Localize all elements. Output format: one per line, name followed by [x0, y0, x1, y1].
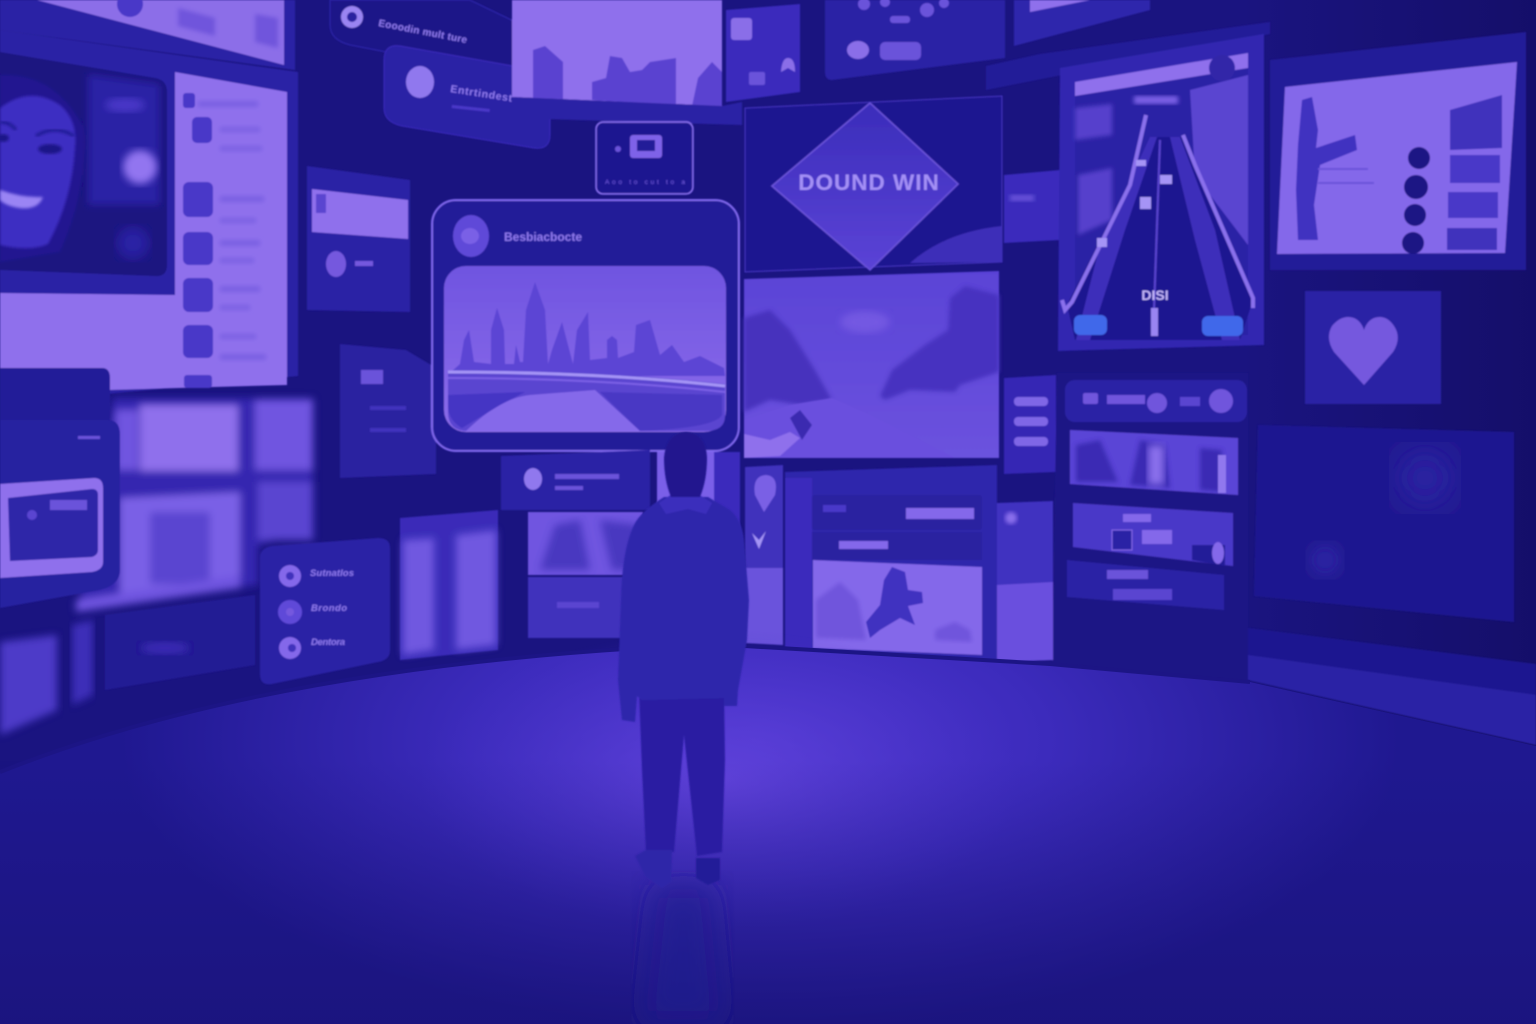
- icon: heart: [1329, 317, 1398, 385]
- panel: bottom left cards: [0, 595, 255, 735]
- legs: [639, 690, 725, 856]
- panel: lower left blurred screens: [76, 398, 498, 660]
- panel: left mid card: [307, 166, 410, 312]
- panel: dark blank screen: [1254, 425, 1514, 622]
- panel: main landscape card: [432, 200, 739, 451]
- panel: top left floating cards: [330, 0, 550, 148]
- head: [664, 432, 707, 497]
- panel: diamond title screen: [745, 96, 1002, 272]
- panel: lower media feed: [785, 465, 1053, 662]
- screen wall: [0, 0, 1536, 745]
- panel: main landscape card: Besbiacbocte: [504, 230, 582, 244]
- panel: lower central cards: [501, 450, 740, 647]
- panel: top left floating cards: Entrtindestuy: [450, 83, 527, 107]
- image: figure in snow: [813, 560, 982, 655]
- list icons: [183, 93, 213, 388]
- panel: top centre city screen: [512, 0, 742, 125]
- panel: heart card: [1305, 291, 1441, 404]
- panel: side small cards: [1004, 170, 1060, 474]
- list lines: [198, 101, 266, 360]
- jacket: [618, 497, 749, 722]
- panel: contact list card: [260, 538, 390, 684]
- panel: figure sketch screen: [1270, 32, 1526, 270]
- race track: [1062, 115, 1253, 340]
- image: futuristic city and road: [444, 266, 726, 432]
- diamond text: DOUND WIN: [798, 170, 940, 195]
- panel: racing game screen: [1058, 34, 1264, 351]
- panel: right lower wall strip: [1248, 628, 1536, 745]
- panel: right column of media cards: [1052, 373, 1248, 682]
- photo: smiling woman: [0, 52, 167, 276]
- floor: [0, 630, 1536, 1024]
- figure: man standing from behind: [618, 432, 749, 1024]
- panel: profile screen with face and list: [0, 30, 298, 404]
- panel: top left screen: [0, 0, 295, 70]
- panel: dark folder card: [340, 344, 436, 478]
- game label: DISI: [1141, 287, 1169, 303]
- panel: mountain landscape: [744, 271, 999, 458]
- right side shading: [1240, 0, 1536, 1024]
- panel: top small cards: [726, 0, 1270, 102]
- panel: left phone card: [0, 368, 120, 608]
- panel: pin and heart strip: [745, 465, 783, 645]
- panel: contact list card: Brondo: [311, 603, 347, 614]
- panel: contact list card: Sutnatlos: [310, 568, 354, 579]
- panel: contact list card: Dentora: [311, 637, 345, 648]
- panel: small icon card: [596, 122, 693, 194]
- shoes: [635, 850, 672, 888]
- panel: top left floating cards: Eooodin mult ture: [377, 18, 468, 46]
- panel: small icon card: Aoo to cut to a: [605, 179, 685, 186]
